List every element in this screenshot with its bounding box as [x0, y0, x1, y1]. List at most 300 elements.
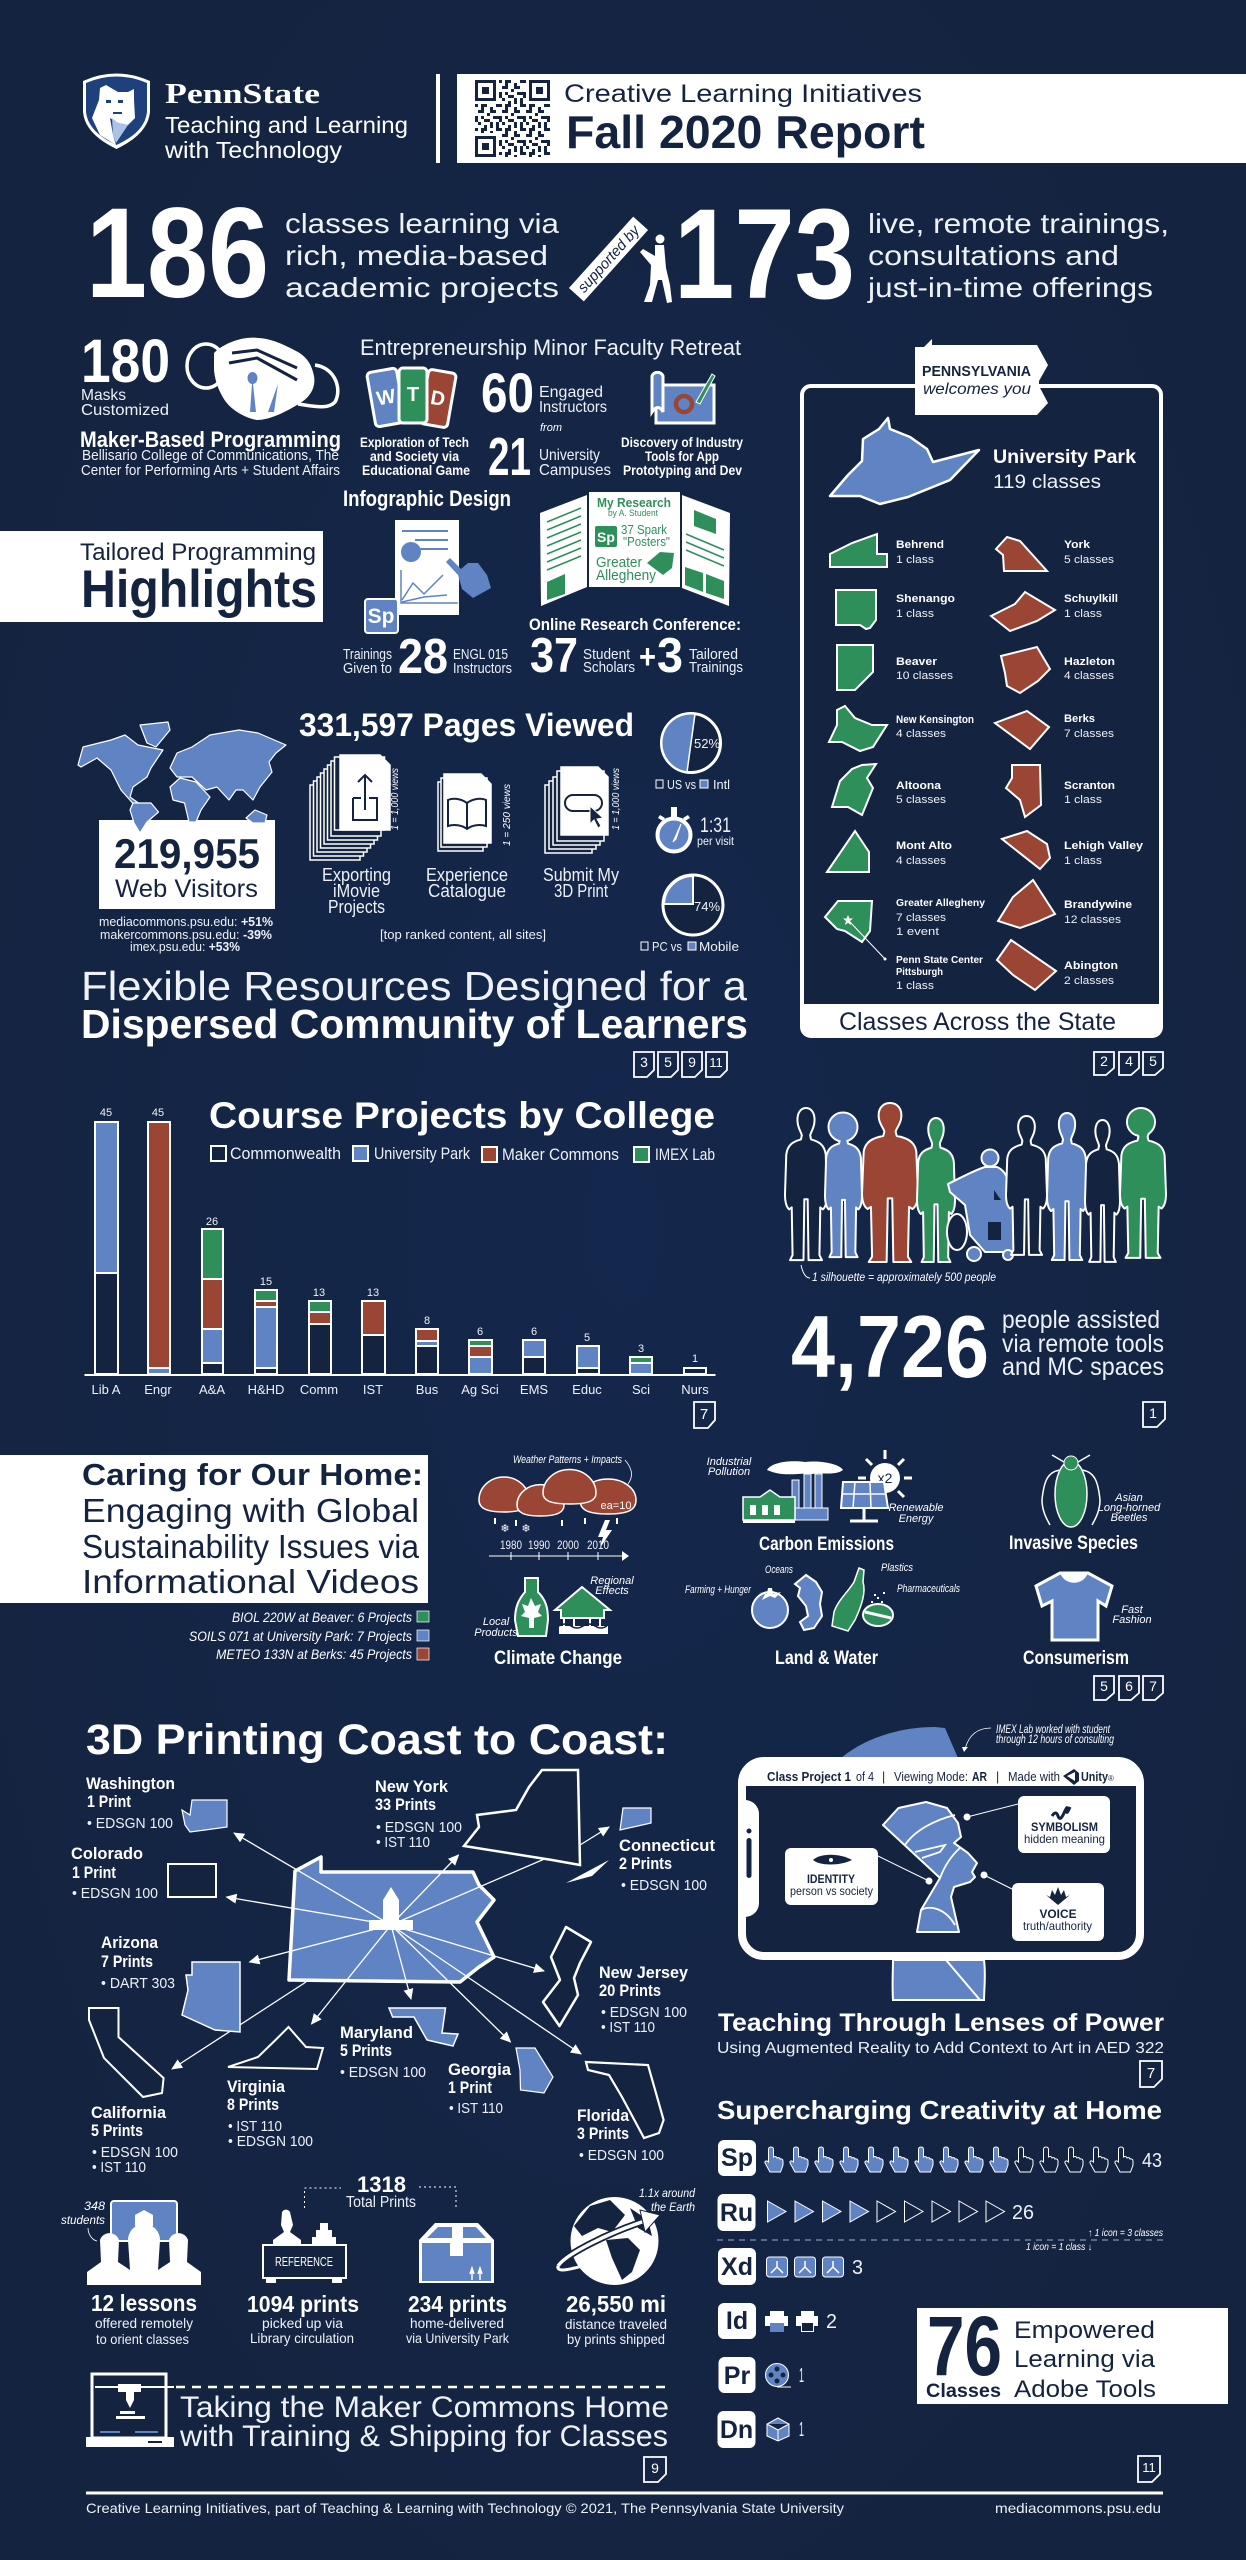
icon: pills: [863, 1592, 893, 1626]
icon: globe with orbit: 1.1x around: [639, 2186, 695, 2200]
stat: 26,550 miles: distance traveled: [565, 2316, 667, 2332]
state: Florida: Florida: [577, 2106, 629, 2125]
chart: PC vs mobile pie: [641, 875, 739, 954]
map shape: University Park: [830, 418, 1136, 504]
icon: storm clouds: ea=10: [601, 1500, 631, 1512]
heading: flexible resources: Dispersed Community of Learners: [81, 1001, 748, 1047]
pictogram row: XD 3: Xd: [721, 2253, 753, 2281]
silhouette: person 2: [825, 1112, 862, 1257]
entrepreneurship minor faculty retreat: Entrepreneurship Minor Faculty Retreat: [360, 335, 741, 360]
stat: 12 lessons: to orient classes: [96, 2331, 189, 2347]
state: New York: • EDSGN 100: [376, 1819, 462, 1836]
campus: Greater Allegheny and Pittsburgh: Pittsburgh: [896, 967, 943, 978]
campus: Abington: Abington: [1064, 960, 1118, 972]
icon: reference desk: [263, 2210, 346, 2283]
sign: Pennsylvania welcomes you: welcomes you: [923, 381, 1031, 398]
campus: Beaver: [837, 645, 954, 690]
stat: 4,726 people: and MC spaces: [1002, 1353, 1164, 1381]
banner: tailored programming highlights: Highlights: [81, 560, 317, 619]
icon: game cards: [367, 368, 456, 428]
web visitors card: Web Visitors: [115, 875, 258, 903]
state: New York: • IST 110: [376, 1834, 430, 1851]
report title: Fall 2020 Report: [566, 106, 925, 158]
logo: Penn State shield: [83, 74, 150, 149]
campus: York: York: [1064, 539, 1091, 551]
callout: voice: truth/authority: [1023, 1919, 1092, 1933]
pictogram row: Rush 26: [718, 2194, 1034, 2231]
icon: tri-fold poster: by A. Student: [608, 508, 658, 518]
stat: 4,726 people: via remote tools: [1002, 1330, 1164, 1358]
bar category labels: Bus: [416, 1382, 439, 1397]
note: IMEX consulting: through 12 hours of consulting: [996, 1732, 1114, 1746]
entrepreneurship minor faculty retreat: [360, 335, 743, 487]
icon: maple syrup bottle: [515, 1578, 548, 1636]
callout: identity: person vs society: [790, 1884, 873, 1898]
note: IMEX consulting: [962, 1722, 1114, 1752]
icon: stopwatch: per visit: [697, 834, 735, 848]
state: New York: 33 Prints: [375, 1795, 436, 1814]
legend: sustainability projects: [189, 1609, 429, 1662]
state: Arizona: [101, 1933, 240, 2032]
chart legend: [211, 1144, 715, 1164]
page references 2 4 5: 4: [1125, 1053, 1133, 1069]
campus: New Kensington: 4 classes: [896, 728, 947, 740]
icon scale notes: [390, 768, 622, 846]
pictogram row: InDesign 2: [718, 2303, 837, 2339]
text: site traffic changes: imex.psu.edu: +53%: [130, 939, 240, 954]
text: top content labels: 3D Print: [554, 881, 608, 901]
state: Virginia: • EDSGN 100: [228, 2133, 313, 2150]
campus: Lehigh Valley: Lehigh Valley: [1064, 840, 1144, 852]
state: Georgia: 1 Print: [448, 2078, 492, 2097]
organization name: [164, 78, 408, 163]
stat: 1318 total prints: [304, 2172, 456, 2211]
stat: 186 classes: academic projects: [285, 272, 559, 303]
heading: supercharging creativity: Supercharging Creativity at Home: [717, 2095, 1162, 2125]
banner: tailored programming highlights: Tailored Programming: [80, 539, 316, 566]
phone status bar: Viewing Mode:: [894, 1770, 968, 1784]
text: exploration: [360, 435, 470, 478]
caption: silhouette scale: 1 silhouette = approximately 500 people: [812, 1270, 996, 1284]
page references 3 5 9 11: 9: [688, 1054, 696, 1070]
text: exploration: Exploration of Tech: [360, 435, 469, 450]
icon: storm clouds: ❄: [500, 1523, 510, 1535]
bar category labels: [92, 1382, 709, 1397]
bar category labels: EMS: [520, 1382, 548, 1397]
banner: caring for our home: Caring for Our Home:: [82, 1457, 423, 1492]
page reference 7: [694, 1402, 715, 1428]
state: Colorado: • EDSGN 100: [72, 1885, 158, 1902]
section: supercharging creativity: [717, 2095, 1228, 2448]
state: Colorado: Colorado: [71, 1844, 143, 1863]
chart: US vs international pie: US vs: [667, 777, 696, 792]
icon: storm clouds: [479, 1470, 636, 1548]
campus: Mont Alto: [827, 831, 952, 872]
page references 5 6 7: 5: [1100, 1678, 1108, 1694]
pictogram row: Dimension 1: [718, 2411, 804, 2448]
state: Washington: Washington: [86, 1774, 175, 1793]
section: 3D printing coast to coast: [71, 1716, 715, 2176]
icon: 3D printer: [86, 2374, 174, 2447]
bar value labels: 13: [313, 1287, 325, 1299]
banner: tailored programming highlights: [0, 531, 323, 622]
pictogram row: Rush 26: Ru: [720, 2199, 753, 2227]
pictogram row: InDesign 2: 2: [826, 2311, 837, 2333]
stat: 186 classes: classes learning via: [285, 208, 559, 239]
icon: tri-fold poster: My Research: [597, 495, 671, 510]
stacked bar chart: [85, 1122, 715, 1376]
text: conference stats: +: [639, 638, 656, 676]
phone status bar: Unity: [1081, 1770, 1108, 1784]
campus: York: [996, 537, 1115, 571]
campus: Brandywine: Brandywine: [1064, 899, 1132, 911]
text: conference stats: Trainings: [689, 659, 743, 676]
heading: teaching through lenses of power: Teaching Through Lenses of Power: [718, 2009, 1164, 2037]
state: Maryland: • EDSGN 100: [340, 2064, 426, 2081]
campus: Mont Alto: 4 classes: [896, 855, 947, 867]
bar value labels: 6: [531, 1326, 537, 1338]
stat: 28 instructors: Trainings: [343, 646, 392, 663]
icon: tri-fold poster: [540, 492, 730, 606]
state: New Jersey: 20 Prints: [599, 1981, 661, 2000]
campus: Behrend: [830, 534, 944, 567]
state: California: California: [91, 2103, 167, 2122]
callout: 76 classes: Adobe Tools: [1014, 2376, 1156, 2403]
state: Maryland: Maryland: [340, 2023, 413, 2042]
icon: reference desk: REFERENCE: [275, 2254, 333, 2269]
stat: 21 campuses: [488, 427, 611, 487]
text: taking the maker commons home: with Training & Shipping for Classes: [179, 2420, 668, 2453]
state: Arizona: 7 Prints: [101, 1952, 153, 1971]
state: Connecticut: • EDSGN 100: [621, 1877, 707, 1894]
campus: Scranton: 1 class: [1064, 794, 1103, 806]
stat: 28 instructors: 28: [398, 630, 448, 684]
carbon annotations: Energy: [899, 1513, 935, 1525]
icon: sun and solar panel: x2: [878, 1470, 893, 1486]
page reference 7: 7: [700, 1406, 708, 1423]
text: discovery: Tools for App: [645, 449, 719, 464]
banner: caring for our home: Sustainability Issues via: [82, 1528, 420, 1565]
footer: Creative Learning Initiatives, part of Teaching & Learning with Technology © 2021, The Pennsylvania State University: [86, 2500, 844, 2516]
callout: 76 classes: Classes: [926, 2381, 1001, 2402]
stat: 234 prints: [406, 2291, 510, 2346]
section: supercharging creativity: 1: [799, 2419, 804, 2441]
callout: symbolism: hidden meaning: [1024, 1832, 1105, 1846]
phone status bar: |: [882, 1770, 885, 1784]
stat: 1094 prints: 1094 prints: [247, 2291, 359, 2317]
text: discovery: Discovery of Industry: [621, 435, 743, 450]
scale divider notes: 1 icon = 1 class ↓: [1026, 2242, 1092, 2253]
phone frame: [742, 1761, 1140, 1956]
icon: figure holding supported-by sign: supported by: [574, 221, 644, 296]
pictogram row: Premiere 1: Pr: [724, 2362, 750, 2390]
campus: Shenango: [836, 590, 955, 629]
campus: Shenango: Shenango: [896, 593, 955, 605]
stat: 173 trainings: consultations and: [868, 240, 1119, 271]
state: New York: New York: [375, 1777, 449, 1796]
climate change annotations: [474, 1575, 634, 1639]
legend: sustainability projects: METEO 133N at Berks: 45 Projects: [216, 1646, 412, 1662]
land and water annotations: Farming + Hunger: [685, 1584, 752, 1596]
web visitors card: [99, 820, 275, 909]
label: carbon emissions: Carbon Emissions: [759, 1534, 894, 1555]
topic: invasive species: [1009, 1455, 1161, 1554]
stat: 12 lessons: 12 lessons: [91, 2290, 197, 2316]
bar value labels: 45: [100, 1107, 112, 1119]
campus: Greater Allegheny and Pittsburgh: 7 classes: [896, 912, 947, 924]
campus: Brandywine: [998, 880, 1132, 928]
beetle annotation: Long-horned: [1098, 1502, 1161, 1514]
page references 2 4 5: 5: [1149, 1053, 1157, 1069]
icon: catalogue document stack: [438, 774, 491, 851]
text: top content labels: Submit My: [543, 865, 619, 885]
map: Pennsylvania hub with arrows: [172, 1827, 609, 2069]
panel caption: Classes Across the State: [839, 1008, 1116, 1036]
pages viewed: [299, 707, 739, 954]
bar value labels: 8: [424, 1315, 430, 1327]
stat: 180 masks: Customized: [81, 402, 169, 419]
footer: [86, 2492, 1163, 2516]
header: [83, 74, 1246, 163]
carbon annotations: Industrial: [707, 1456, 752, 1468]
legend: sustainability projects: BIOL 220W at Beaver: 6 Projects: [232, 1609, 412, 1625]
state: Washington: 1 Print: [87, 1792, 131, 1811]
text: top content labels: [top ranked content, all sites]: [380, 927, 546, 942]
text: top content labels: iMovie: [333, 881, 380, 901]
stat: 21 campuses: Campuses: [539, 462, 611, 479]
stat: 186 classes: rich, media-based: [285, 240, 548, 271]
stat: 60 instructors: Instructors: [539, 399, 607, 416]
callout: 76 classes: [917, 2299, 1228, 2404]
stat: 60 instructors: from: [540, 422, 562, 434]
infographic design: Infographic Design: [343, 486, 511, 511]
stat: 180 masks: [81, 327, 170, 419]
text: conference stats: Student: [583, 646, 631, 663]
chart: PC vs mobile pie: PC vs: [652, 939, 682, 954]
icon scale notes: 1 = 1,000 views: [390, 768, 401, 830]
state: California: 5 Prints: [91, 2121, 143, 2140]
stat: 234 prints: 234 prints: [408, 2291, 507, 2317]
stat: 1094 prints: [247, 2291, 359, 2346]
icon: game cards: W: [375, 385, 397, 410]
stat: 180 masks: Masks: [81, 387, 126, 404]
state: California: • IST 110: [92, 2159, 146, 2176]
icon: plastic bottle: [832, 1568, 864, 1631]
state: Georgia: Georgia: [448, 2060, 512, 2079]
icon scale notes: 1 = 1,000 views: [611, 768, 622, 830]
campus: Shenango: 1 class: [896, 608, 935, 620]
icon: face mask: [187, 338, 338, 420]
heading: course projects: Course Projects by College: [209, 1095, 715, 1136]
icon: tri-fold poster: Sp: [597, 529, 615, 545]
icon: laptop and students: [61, 2199, 201, 2285]
organization name: with Technology: [164, 137, 343, 163]
banner: caring for our home: [0, 1455, 428, 1603]
phone status bar: Made with: [1008, 1770, 1060, 1784]
icon: t-shirt: [1036, 1573, 1112, 1640]
chart: weather timeline: 2010: [587, 1538, 609, 1552]
icon: tri-fold poster: "Posters": [623, 534, 670, 549]
state: Virginia: Virginia: [227, 2077, 286, 2096]
page references 5 6 7: [1094, 1676, 1163, 1700]
state: Maryland: [340, 2008, 458, 2081]
text: top content labels: Projects: [328, 897, 385, 917]
callout: voice: VOICE: [1040, 1907, 1076, 1921]
stat: 1318 total prints: 1318: [357, 2172, 406, 2197]
icon: stopwatch: 1:31: [700, 814, 731, 837]
sign: Pennsylvania welcomes you: PENNSYLVANIA: [922, 363, 1031, 380]
icon: laptop and students: 348: [84, 2199, 105, 2213]
beetle annotation: Asian: [1114, 1492, 1143, 1504]
text: exploration: Educational Game: [362, 463, 470, 478]
page references 2 4 5: [1094, 1052, 1163, 1075]
silhouette: wheelchair user: [947, 1150, 1022, 1261]
chart: weather timeline: 2000: [557, 1538, 579, 1552]
state: Florida: 3 Prints: [577, 2124, 629, 2143]
state: New York: [375, 1770, 609, 1883]
icon: shipping box: [419, 2223, 494, 2283]
bar value labels: 3: [638, 1343, 644, 1355]
bar value labels: 13: [367, 1287, 379, 1299]
QR code: [475, 80, 550, 157]
stat: 1318 total prints: Total Prints: [346, 2194, 416, 2211]
stat: 4,726 people: people assisted: [1002, 1306, 1160, 1334]
stat: 234 prints: home-delivered: [410, 2315, 504, 2331]
land and water annotations: Plastics: [881, 1562, 913, 1574]
chart: US vs international pie: 52%: [694, 736, 720, 751]
chart legend: University Park: [374, 1144, 470, 1163]
campus: Greater Allegheny and Pittsburgh: 1 class: [896, 980, 935, 992]
state: Colorado: [71, 1844, 216, 1902]
map shape: University Park: 119 classes: [993, 472, 1101, 493]
heading: flexible resources: [81, 963, 748, 1047]
pictogram row: Spark 43: Sp: [721, 2144, 753, 2172]
state: Georgia: [448, 2048, 553, 2117]
climate change annotations: Local: [483, 1616, 510, 1628]
chart legend: Commonwealth: [230, 1144, 341, 1163]
pictogram row: Rush 26: 26: [1012, 2202, 1034, 2224]
text: conference stats: Tailored: [689, 646, 738, 663]
state: California: [89, 2008, 178, 2176]
icon scale notes: 1 = 250 views: [502, 784, 513, 846]
pictogram row: Dimension 1: Dn: [720, 2416, 753, 2444]
campus: Abington: 2 classes: [1064, 975, 1115, 987]
report title banner: [457, 74, 1246, 163]
icon: tri-fold poster: Allegheny: [596, 567, 656, 584]
pictogram row: XD 3: 3: [852, 2257, 863, 2279]
text: maker-based programming: Center for Performing Arts + Student Affairs: [81, 462, 340, 479]
text: top content labels: [322, 865, 619, 942]
state: New Jersey: • IST 110: [601, 2019, 655, 2036]
report title: Creative Learning Initiatives: [564, 80, 922, 108]
phone status bar: |: [996, 1770, 999, 1784]
icon: document with chart and hand: [365, 520, 491, 633]
campus: Behrend: Behrend: [896, 539, 944, 551]
campus: Altoona: [832, 764, 947, 815]
phone status bar: ®: [1108, 1774, 1114, 1783]
chart: weather timeline: [489, 1454, 632, 1561]
silhouette: person 9: [1120, 1108, 1166, 1258]
phone status bar: AR: [972, 1770, 987, 1784]
page references 3 5 9 11: 5: [664, 1054, 672, 1070]
bar category labels: H&HD: [248, 1382, 284, 1397]
bar value labels: 5: [584, 1332, 590, 1344]
page reference 9: 9: [651, 2460, 659, 2476]
bar value labels: 15: [260, 1276, 272, 1288]
campus: Greater Allegheny and Pittsburgh: Penn State Center: [896, 955, 983, 966]
state: Virginia: 8 Prints: [227, 2095, 279, 2114]
text: conference stats: Online Research Conference:: [529, 615, 741, 634]
state: New Jersey: • EDSGN 100: [601, 2004, 687, 2021]
stat: 180 masks: 180: [81, 327, 170, 395]
icon: Nefertiti crown behind phone: [841, 1727, 985, 2000]
carbon annotations: [707, 1456, 944, 1525]
pages viewed: 331,597 Pages Viewed: [299, 707, 634, 743]
scale divider notes: [717, 2228, 1163, 2253]
sign: Pennsylvania welcomes you: [915, 339, 1048, 415]
callout: identity: [785, 1848, 932, 1905]
shirt annotation: [1112, 1604, 1152, 1626]
bar value labels: 26: [206, 1216, 218, 1228]
icon: globe with orbit: [558, 2186, 695, 2285]
chart legend: IMEX Lab: [655, 1145, 715, 1164]
icon: seahorse: [795, 1575, 822, 1630]
text: top content labels: Exporting: [322, 865, 391, 885]
state: New Jersey: [543, 1927, 689, 2036]
stat: 28 instructors: ENGL 015: [453, 646, 508, 663]
icon: factory: [743, 1461, 843, 1523]
state: Florida: [577, 2062, 664, 2164]
text: maker-based programming: Maker-Based Programming: [80, 427, 341, 452]
report title: [564, 80, 925, 158]
campus: Schuylkill: [991, 592, 1118, 631]
campus: Berks: Berks: [1064, 713, 1095, 725]
icon: stopwatch: [658, 807, 735, 852]
callout: symbolism: SYMBOLISM: [1031, 1820, 1098, 1834]
icon: document with chart and hand: Sp: [368, 605, 394, 628]
silhouette: person 7: [1047, 1113, 1087, 1260]
web visitors card: 219,955: [114, 830, 260, 877]
page references 2 4 5: 2: [1100, 1053, 1108, 1069]
maker-based programming: [80, 327, 341, 479]
campus: Schuylkill: Schuylkill: [1064, 593, 1118, 605]
campus: Altoona: Altoona: [896, 780, 942, 792]
stat: 12 lessons: offered remotely: [95, 2315, 193, 2331]
bar value labels: 45: [152, 1107, 164, 1119]
campus: New Kensington: New Kensington: [896, 714, 974, 726]
bar value labels: [100, 1107, 698, 1365]
campus: Mont Alto: Mont Alto: [896, 840, 952, 852]
stat: 21 campuses: University: [539, 447, 600, 464]
callout: voice: [980, 1872, 1104, 1941]
icon: tomato: [752, 1588, 788, 1628]
pictogram row: Premiere 1: [718, 2357, 804, 2393]
silhouette: person 1: [785, 1108, 827, 1260]
bar category labels: A&A: [199, 1382, 225, 1397]
people silhouettes: [785, 1103, 1166, 1262]
label: climate change: Climate Change: [494, 1648, 622, 1669]
page references 5 6 7: 7: [1149, 1678, 1157, 1694]
stat: 26,550 miles: [565, 2291, 667, 2347]
state: Arizona: Arizona: [101, 1933, 158, 1952]
bar value labels: 1: [692, 1353, 698, 1365]
state: Georgia: • IST 110: [449, 2100, 503, 2117]
text: exploration: and Society via: [370, 449, 459, 464]
state: New Jersey: New Jersey: [599, 1963, 689, 1982]
label: invasive species: Invasive Species: [1009, 1533, 1138, 1554]
topic: consumerism: [1023, 1573, 1152, 1669]
organization name: PennState: [165, 78, 320, 110]
